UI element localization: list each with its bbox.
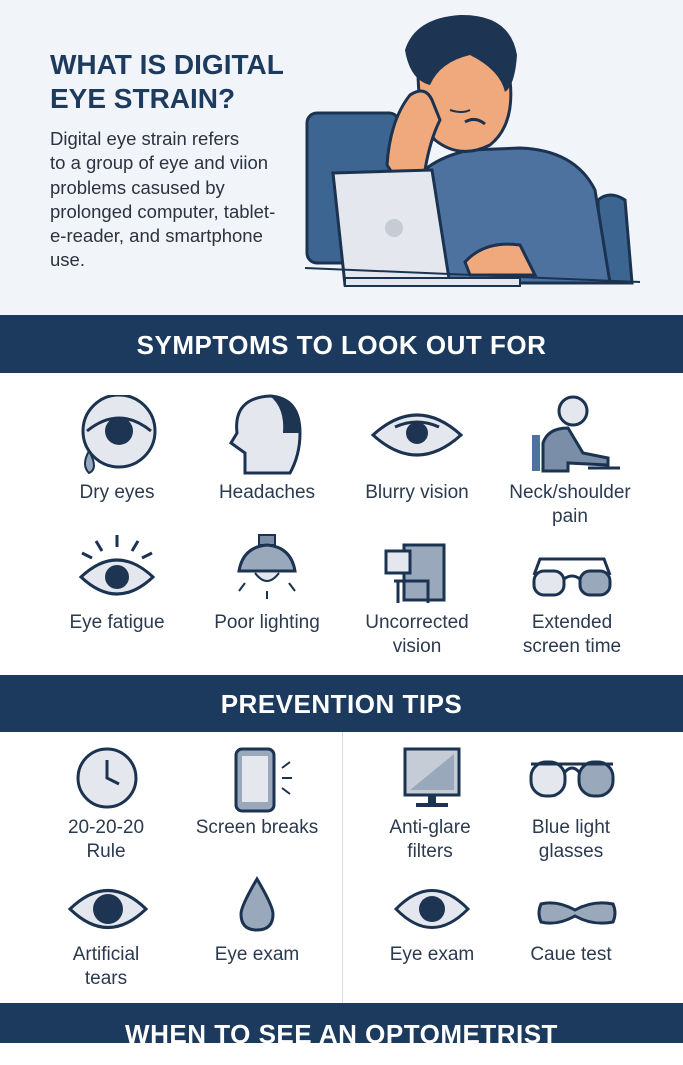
panel: symptoms: Blurry vision [365, 482, 469, 503]
panel: prevention: 20-20-20 [68, 817, 144, 838]
panel: prevention: Rule [86, 841, 126, 862]
icon: clock [76, 748, 138, 808]
panel: symptoms: Poor lighting [214, 612, 320, 633]
icon: drop [240, 876, 274, 932]
icon: blue light glasses [530, 760, 614, 798]
icon: glasses [532, 558, 612, 596]
intro text: use. [50, 249, 85, 270]
banner: when to see an optometrist [0, 1003, 683, 1043]
panel: symptoms: vision [393, 636, 441, 657]
panel: prevention: tears [85, 968, 127, 989]
intro text: problems casused by [50, 177, 225, 198]
icon: eye (artificial tears) [68, 888, 148, 930]
intro text [50, 128, 275, 270]
panel: symptoms: Uncorrected [365, 612, 469, 633]
panel: symptoms: pain [552, 506, 588, 527]
panel: symptoms: screen time [523, 636, 621, 657]
icon: cause test [538, 901, 616, 925]
intro text: to a group of eye and viion [50, 152, 268, 173]
icon: headaches [229, 394, 302, 474]
intro text: Digital eye strain refers [50, 128, 239, 149]
panel: prevention: Blue light [532, 817, 610, 838]
panel: prevention: Screen breaks [196, 817, 318, 838]
panel: prevention: Artificial [73, 944, 139, 965]
panel: prevention: Caue test [530, 944, 612, 965]
panel: prevention: glasses [539, 841, 603, 862]
icon: blurry vision [370, 413, 464, 457]
title: WHAT IS DIGITAL [50, 49, 284, 80]
panel: prevention [68, 732, 616, 1003]
panel: symptoms: Neck/shoulder [509, 482, 631, 503]
panel: prevention: Anti-glare [389, 817, 471, 838]
icon: poor lighting [237, 534, 297, 599]
panel: prevention: Eye exam [390, 944, 474, 965]
icon: uncorrected vision [384, 544, 446, 603]
icon: monitor [404, 748, 460, 807]
panel: prevention: Eye exam [215, 944, 299, 965]
title: EYE STRAIN? [50, 83, 235, 114]
panel: symptoms: Eye fatigue [69, 612, 165, 633]
panel: symptoms: Headaches [219, 482, 315, 503]
banner: when to see an optometrist: WHEN TO SEE AN OPTOMETRIST [125, 1019, 558, 1049]
illustration: man at laptop [304, 15, 640, 287]
icon: eye fatigue [78, 535, 156, 596]
panel: symptoms: Extended [532, 612, 612, 633]
top section [0, 0, 683, 315]
banner: symptoms: SYMPTOMS TO LOOK OUT FOR [137, 330, 546, 360]
icon: dry eyes [82, 395, 156, 474]
banner: symptoms [0, 315, 683, 373]
banner: prevention [0, 675, 683, 732]
title [50, 49, 284, 114]
panel: prevention: filters [407, 841, 453, 862]
icon: neck pain [532, 396, 620, 472]
intro text: e-reader, and smartphone [50, 225, 263, 246]
panel: symptoms: Dry eyes [80, 482, 154, 503]
panel: symptoms [69, 394, 631, 657]
intro text: prolonged computer, tablet- [50, 201, 275, 222]
icon: eye (exam) [394, 889, 470, 929]
icon: tablet [234, 748, 292, 812]
banner: prevention: PREVENTION TIPS [221, 689, 462, 719]
